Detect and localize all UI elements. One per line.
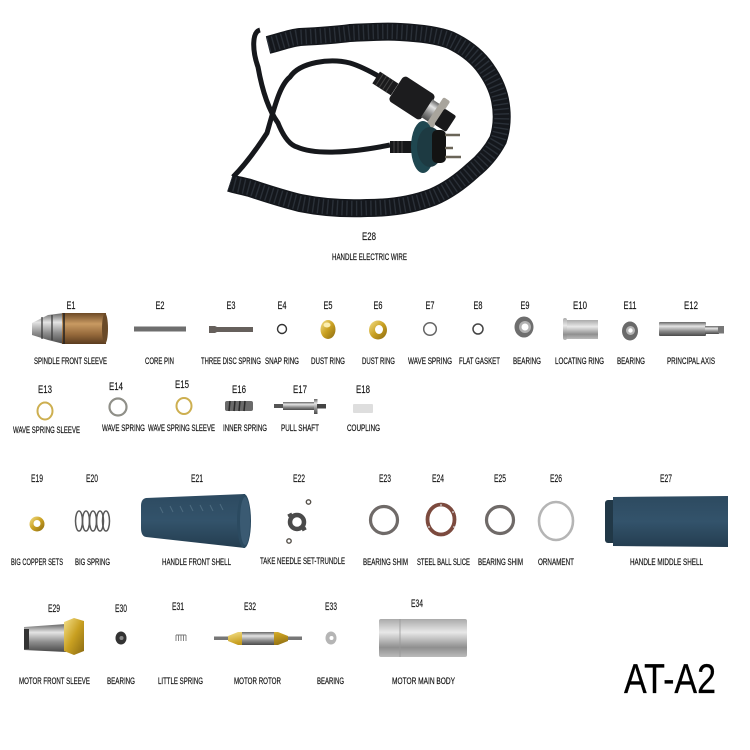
label: E29 [48,603,60,615]
code E28: E28 [362,231,376,243]
name: MOTOR FRONT SLEEVE [19,676,90,687]
name: ORNAMENT [538,557,574,568]
part E13 [13,384,80,436]
icon: handle middle shell [605,496,728,547]
part E27 [605,473,728,568]
name: MOTOR ROTOR [234,676,281,687]
name: BEARING SHIM [478,557,523,568]
label: E12 [684,300,698,312]
part E11 [617,300,645,367]
part E33 [317,601,344,687]
label: E11 [624,300,636,312]
label: E34 [411,598,423,610]
icon: big copper sets [30,516,44,532]
label: E14 [109,381,123,393]
icon: core pin [134,326,186,332]
icon: wave spring [424,323,436,335]
icon: motor rotor [214,632,302,645]
name: COUPLING [347,423,380,434]
part E3 [201,300,261,367]
label: E1 [66,300,76,312]
name: LOCATING RING [555,356,604,367]
part E21 [141,473,251,568]
label: E13 [38,384,52,396]
label: E3 [226,300,236,312]
name: WAVE SPRING [102,423,145,434]
label: E31 [172,601,184,613]
part E6 [362,300,395,367]
name: LITTLE SPRING [158,676,203,687]
icon: three disc spring [209,326,253,333]
name: BIG COPPER SETS [11,557,63,568]
icon: dust ring [320,320,336,339]
part E14 [102,381,145,434]
part E7 [408,300,452,367]
icon: wave spring sleeve [176,398,192,414]
icon: little spring [176,635,186,641]
label: E17 [293,384,307,396]
label: E24 [432,473,444,485]
part E30 [107,603,135,687]
part E20 [75,473,110,568]
part E8 [459,300,500,367]
icon: inner spring [225,401,253,411]
icon: principal axis [659,322,724,336]
label: E4 [278,300,286,312]
icon: handle front shell [141,494,251,548]
label: E10 [573,300,587,312]
part E10 [555,300,604,367]
icon: motor main body [379,619,467,657]
icon: coiled electric wire [230,30,502,208]
label: E27 [660,473,672,485]
icon: flat gasket [473,324,483,334]
name: HANDLE ELECTRIC WIRE [332,252,407,263]
part E12 [659,300,724,367]
part E2 [134,300,186,367]
model title: AT-A2 [624,655,716,702]
name: SNAP RING [265,356,299,367]
label: E16 [232,384,246,396]
part E26 [538,473,574,568]
name: MOTOR MAIN BODY [392,676,455,687]
label: E33 [325,601,337,613]
icon: steel ball slice [428,504,455,534]
name: FLAT GASKET [459,356,500,367]
part E19 [11,473,63,568]
part E28: handle electric wire [230,30,502,263]
part E29 [19,603,90,687]
icon: bearing [514,316,534,338]
label: E26 [550,473,562,485]
icon: big spring [76,511,110,531]
name: WAVE SPRING SLEEVE [13,425,80,436]
part E9 [513,300,541,367]
icon: coupling [353,404,373,413]
part E1 [32,300,108,367]
label: E8 [474,300,482,312]
part E5 [311,300,345,367]
name: TAKE NEEDLE SET-TRUNDLE [260,556,345,567]
icon: snap ring [278,324,286,334]
icon: bearing shim [370,506,398,534]
label: E15 [175,379,189,391]
name: BEARING [513,356,541,367]
icon: bearing [622,322,638,340]
label: E18 [356,384,370,396]
name: PULL SHAFT [281,423,319,434]
name: THREE DISC SPRING [201,356,261,367]
icon: wave spring [110,398,126,416]
name: DUST RING [362,356,395,367]
icon: take needle set trundle [287,500,311,543]
name: BEARING [317,676,344,687]
icon: locating ring [563,318,598,340]
name: HANDLE MIDDLE SHELL [630,557,703,568]
label: E20 [86,473,98,485]
icon: wave spring sleeve [38,402,52,420]
name: DUST RING [311,356,345,367]
icon: motor front sleeve [24,618,84,655]
name: INNER SPRING [223,423,267,434]
name: SPINDLE FRONT SLEEVE [34,356,107,367]
label: E22 [293,473,305,485]
name: BEARING [107,676,135,687]
name: HANDLE FRONT SHELL [162,557,231,568]
name: BEARING SHIM [363,557,408,568]
icon: bearing [116,632,126,644]
icon: bearing [326,632,336,644]
icon: dust ring [369,320,387,340]
label: E23 [379,473,391,485]
icon: green pin plug [390,121,461,173]
part E4 [265,300,299,367]
label: E32 [244,601,256,613]
icon: ornament [539,502,573,540]
icon: spindle front sleeve [32,313,108,344]
part E15 [148,379,215,434]
name: BEARING [617,356,645,367]
icon: round connector [372,72,461,139]
icon: bearing shim [486,506,514,534]
label: E9 [520,300,530,312]
part E16 [223,384,267,434]
label: E19 [31,473,43,485]
label: E7 [426,300,434,312]
label: E21 [191,473,203,485]
name: CORE PIN [145,356,174,367]
label: E2 [156,300,164,312]
name: BIG SPRING [75,557,110,568]
part E31 [158,601,203,687]
part E17 [274,384,326,434]
part E22 [260,473,345,567]
name: WAVE SPRING [408,356,452,367]
part E32 [214,601,302,687]
label: E30 [115,603,127,615]
part E24 [417,473,470,568]
label: E6 [374,300,382,312]
name: WAVE SPRING SLEEVE [148,423,215,434]
name: STEEL BALL SLICE [417,557,470,568]
part E18 [347,384,380,434]
part E25 [478,473,523,568]
icon: pull shaft [274,399,326,414]
part E23 [363,473,408,568]
part E34 [379,598,467,687]
label: E5 [324,300,332,312]
name: PRINCIPAL AXIS [667,356,715,367]
label: E25 [494,473,506,485]
